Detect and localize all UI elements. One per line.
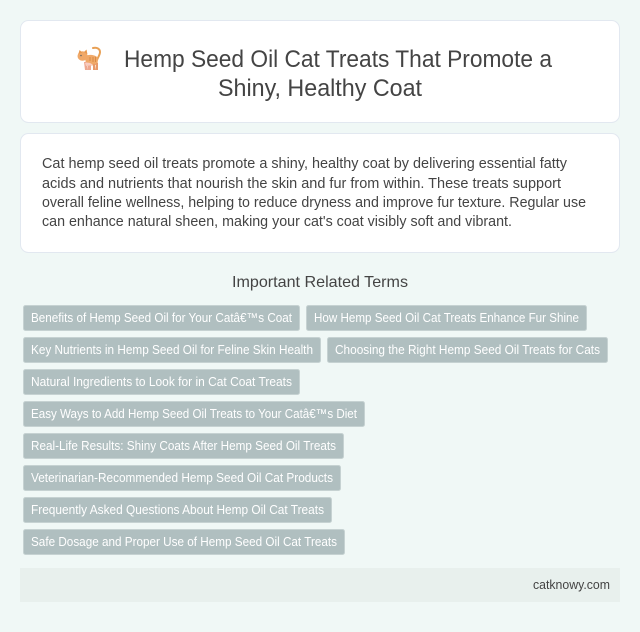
tag: safe dosage — [24, 530, 344, 554]
panel: related term tags — [24, 306, 608, 554]
tag: choosing treats — [328, 338, 608, 362]
panel: title card — [20, 20, 620, 122]
text block: description: acids and nutrients that nourish the skin and fur from within. These treats support — [42, 176, 561, 192]
tag: key nutrients: Key Nutrients in Hemp Seed Oil for Feline Skin Health — [31, 343, 313, 357]
tag: safe dosage: Safe Dosage and Proper Use of Hemp Seed Oil Cat Treats — [31, 535, 337, 549]
tag: natural ingredients: Natural Ingredients to Look for in Cat Coat Treats — [31, 375, 292, 389]
title: Shiny, Healthy Coat — [218, 75, 422, 102]
tag: easy ways — [24, 402, 364, 426]
tag: benefits — [24, 306, 300, 330]
tag: faq: Frequently Asked Questions About Hemp Oil Cat Treats — [31, 503, 324, 517]
text block: description: can enhance natural sheen, making your cat's coat visibly soft and vibrant. — [42, 214, 512, 230]
panel: description — [20, 134, 620, 252]
heading: related terms: Important Related Terms — [232, 274, 408, 291]
tag: faq — [24, 498, 332, 522]
text block: description: Cat hemp seed oil treats promote a shiny, healthy coat by delivering essential fatty — [42, 156, 568, 172]
tag: natural ingredients — [24, 370, 300, 394]
tag: key nutrients — [24, 338, 320, 362]
footer: catknowy.com — [533, 578, 610, 592]
tag: benefits: Benefits of Hemp Seed Oil for Your Catâ€™s Coat — [31, 311, 292, 325]
icon: orange cat — [78, 48, 100, 70]
tag: choosing treats: Choosing the Right Hemp Seed Oil Treats for Cats — [335, 343, 600, 357]
tag: real-life results — [24, 434, 344, 458]
title: Hemp Seed Oil Cat Treats That Promote a — [124, 46, 553, 73]
tag: fur shine: How Hemp Seed Oil Cat Treats Enhance Fur Shine — [314, 311, 579, 325]
footer — [20, 568, 620, 602]
tag: fur shine — [306, 306, 586, 330]
tag: veterinarian-recommended — [24, 466, 340, 490]
tag: real-life results: Real-Life Results: Shiny Coats After Hemp Seed Oil Treats — [31, 439, 336, 453]
text block: description — [42, 156, 586, 230]
tag: veterinarian-recommended: Veterinarian-Recommended Hemp Seed Oil Cat Products — [31, 471, 333, 485]
title — [124, 46, 553, 102]
tag: easy ways: Easy Ways to Add Hemp Seed Oil Treats to Your Catâ€™s Diet — [31, 407, 357, 421]
text block: description: overall feline wellness, helping to reduce dryness and improve fur texture. Regular use — [42, 195, 586, 211]
